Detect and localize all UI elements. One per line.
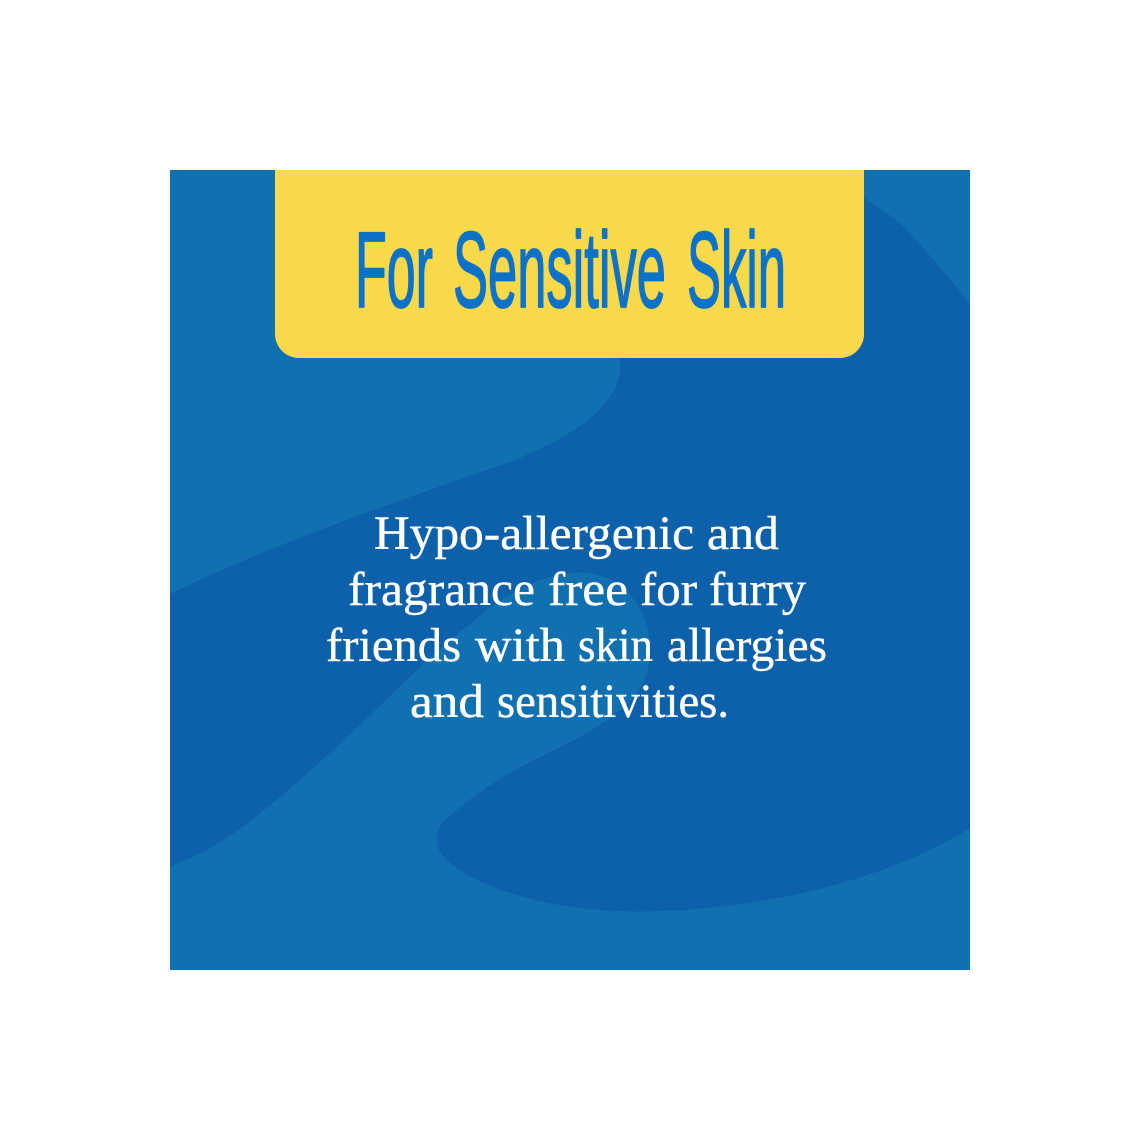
body text: allergies — [667, 619, 827, 672]
banner shape — [275, 170, 864, 358]
heading text: Sensitive — [453, 209, 666, 330]
background wave shape — [170, 170, 970, 911]
body text: skin — [578, 619, 653, 672]
body text: and — [707, 507, 779, 560]
body text: with — [475, 619, 565, 672]
heading banner — [275, 170, 864, 358]
body text: and — [410, 675, 484, 728]
body text: for — [640, 563, 697, 616]
body text: friends — [326, 619, 461, 672]
body text: free — [548, 563, 628, 616]
body text: fragrance — [348, 563, 535, 616]
body text: Hypo-allergenic — [374, 507, 694, 560]
body text: furry — [709, 563, 806, 616]
heading text — [355, 209, 786, 330]
panel background — [170, 170, 970, 970]
heading text: For — [355, 209, 433, 330]
body text: sensitivities. — [497, 675, 729, 728]
body text — [326, 507, 827, 728]
heading banner: Skin — [687, 209, 786, 330]
